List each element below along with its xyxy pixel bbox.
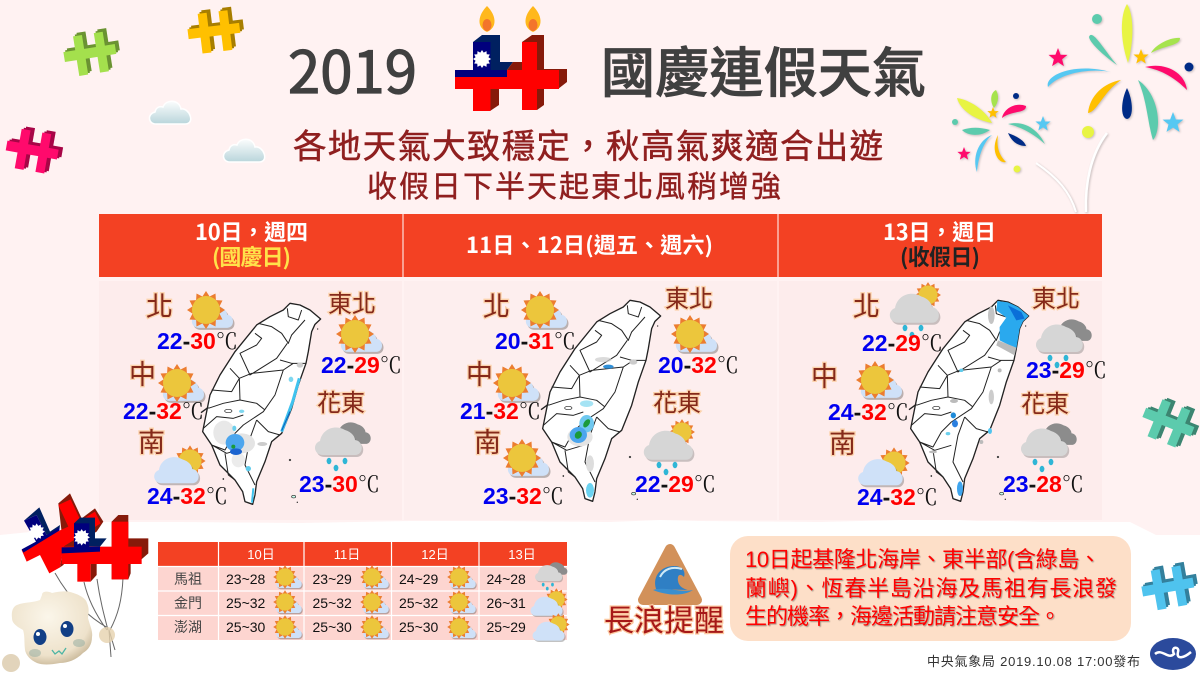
- region: 南: [474, 421, 564, 511]
- region: 中: [123, 353, 206, 426]
- icon: cloud left: [149, 101, 191, 124]
- row: 金門: 26~31: [486, 595, 526, 611]
- region: 中: 24-32℃: [828, 396, 909, 427]
- region: 南: [829, 422, 938, 512]
- decorative hash: pink: [3, 124, 66, 176]
- table header dates: 11日: [334, 547, 360, 562]
- region: 中: 中: [129, 353, 156, 392]
- callout: wave warning text: 10日起基隆北海岸、東半部(含綠島、: [745, 547, 1101, 572]
- row: 金門: 金門: [174, 595, 202, 611]
- island temperature table: [158, 542, 570, 642]
- panel: 10日 forecast: [99, 281, 402, 520]
- row: 澎湖: 25~29: [486, 619, 526, 635]
- region: 東北: 22-29℃: [321, 349, 402, 380]
- icon: fireworks small: [952, 90, 1076, 212]
- decorative hash: green: [61, 27, 123, 78]
- region: 花東: [1003, 384, 1084, 499]
- region: 北: 北: [146, 285, 173, 324]
- row: 馬祖: 馬祖: [174, 571, 202, 587]
- region: 北: [853, 282, 943, 358]
- forecast table header bar: [99, 214, 1102, 277]
- region: 南: 24-32℃: [857, 481, 938, 512]
- row: 金門: 25~32: [399, 595, 439, 611]
- header: 13日: (收假日): [900, 240, 980, 272]
- region: 中: 中: [811, 355, 838, 394]
- region: 中: 中: [466, 353, 493, 392]
- panel: 11-12日 forecast: [404, 279, 777, 520]
- region: 北: 20-31℃: [495, 325, 576, 356]
- mascot: [12, 591, 92, 664]
- title: 國慶連假天氣: 國慶連假天氣: [601, 29, 926, 108]
- region: 東北: 23-29℃: [1026, 354, 1107, 385]
- icon: high wave warning triangle: [643, 549, 697, 600]
- region: 南: 南: [138, 421, 165, 460]
- label: 長浪提醒: 長浪提醒: [604, 596, 724, 640]
- row: 澎湖: 25~30: [226, 619, 266, 635]
- region: 北: 北: [853, 285, 880, 324]
- region: 東北: 東北: [328, 284, 376, 319]
- region: 東北: 東北: [665, 279, 713, 314]
- Taiwan map with rain: [909, 300, 1029, 501]
- icon: cloud right: [223, 139, 265, 162]
- region: 東北: [658, 279, 739, 380]
- subtitle line 1: 各地天氣大致穩定，秋高氣爽適合出遊: [293, 119, 883, 168]
- icon: CWB logo: [1150, 638, 1196, 670]
- region: 南: 南: [829, 422, 856, 461]
- header: 13日: 13日，週日: [883, 215, 996, 247]
- region: 花東: [635, 383, 716, 499]
- row: 金門: 25~32: [226, 595, 266, 611]
- region: 花東: 23-28℃: [1003, 468, 1084, 499]
- subtitle line 2: 收假日下半天起東北風稍增強: [367, 162, 781, 206]
- header: 10日: [195, 215, 308, 272]
- region: 花東: 23-30℃: [299, 468, 380, 499]
- region: 花東: 22-29℃: [635, 468, 716, 499]
- region: 東北: [321, 284, 402, 380]
- region: 東北: [1026, 279, 1107, 385]
- icon: double ten flag candles: [455, 6, 567, 111]
- Taiwan map with rain: [201, 303, 321, 504]
- decorative hash: blue: [1138, 560, 1200, 612]
- region: 北: 22-30℃: [157, 325, 238, 356]
- region: 北: 北: [483, 285, 510, 324]
- bubbles: [2, 627, 115, 672]
- Taiwan map with rain: [541, 300, 661, 501]
- header: 10日: (國慶日): [212, 240, 291, 272]
- region: 中: [811, 355, 909, 427]
- region: 東北: 20-32℃: [658, 349, 739, 380]
- balloon: right flag: [62, 515, 148, 582]
- region: 南: 南: [474, 421, 501, 460]
- header: 13日: [883, 215, 996, 272]
- region: 花東: [299, 383, 380, 499]
- callout: wave warning text: [730, 536, 1131, 641]
- header: 11-12日: 11日、12日(週五、週六): [466, 228, 713, 260]
- region: 北: [146, 285, 238, 356]
- decorative hash: orange: [185, 6, 246, 55]
- table header dates: 13日: [508, 547, 536, 562]
- region: 中: 22-32℃: [123, 395, 204, 426]
- region: 北: [483, 285, 576, 356]
- row: 澎湖: [174, 613, 570, 642]
- region: 中: [460, 353, 541, 426]
- region: 南: [138, 421, 228, 511]
- icon: flag balloons and mascot: [2, 493, 148, 672]
- balloon strings: [55, 573, 123, 657]
- row: 澎湖: 25~30: [399, 619, 439, 635]
- row: 金門: [174, 588, 568, 617]
- header: 10日: 10日，週四: [195, 215, 308, 247]
- region: 中: 21-32℃: [460, 395, 541, 426]
- region: 南: 24-32℃: [147, 480, 228, 511]
- table header dates: [247, 547, 536, 562]
- row: 澎湖: 25~30: [312, 619, 352, 635]
- decorative hash: teal: [1136, 392, 1200, 453]
- table header dates: 10日: [247, 547, 275, 562]
- panel: 13日 forecast: [779, 279, 1107, 520]
- table header dates: 12日: [421, 547, 449, 562]
- region: 花東: 花東: [653, 383, 701, 418]
- row: 馬祖: 23~29: [312, 571, 352, 587]
- row: 金門: 25~32: [312, 595, 352, 611]
- region: 南: 23-32℃: [483, 480, 564, 511]
- row: 馬祖: 24~28: [486, 571, 526, 587]
- icon: fireworks large: [1048, 4, 1194, 212]
- row: 馬祖: 24~29: [399, 571, 439, 587]
- title: year: 2019: [288, 26, 417, 110]
- region: 花東: 花東: [317, 383, 365, 418]
- row: 馬祖: [174, 562, 567, 591]
- region: 北: 22-29℃: [862, 327, 943, 358]
- region: 花東: 花東: [1021, 384, 1069, 419]
- footer: issuer and time: 中央氣象局 2019.10.08 17:00發布: [927, 654, 1140, 669]
- callout: wave warning text: 生的機率，海邊活動請注意安全。: [745, 604, 1061, 629]
- row: 澎湖: 澎湖: [174, 619, 202, 635]
- callout: wave warning text: 蘭嶼)、恆春半島沿海及馬祖有長浪發: [745, 576, 1117, 601]
- region: 東北: 東北: [1032, 279, 1080, 314]
- balloon: left flag: [22, 493, 103, 573]
- row: 馬祖: 23~28: [226, 571, 266, 587]
